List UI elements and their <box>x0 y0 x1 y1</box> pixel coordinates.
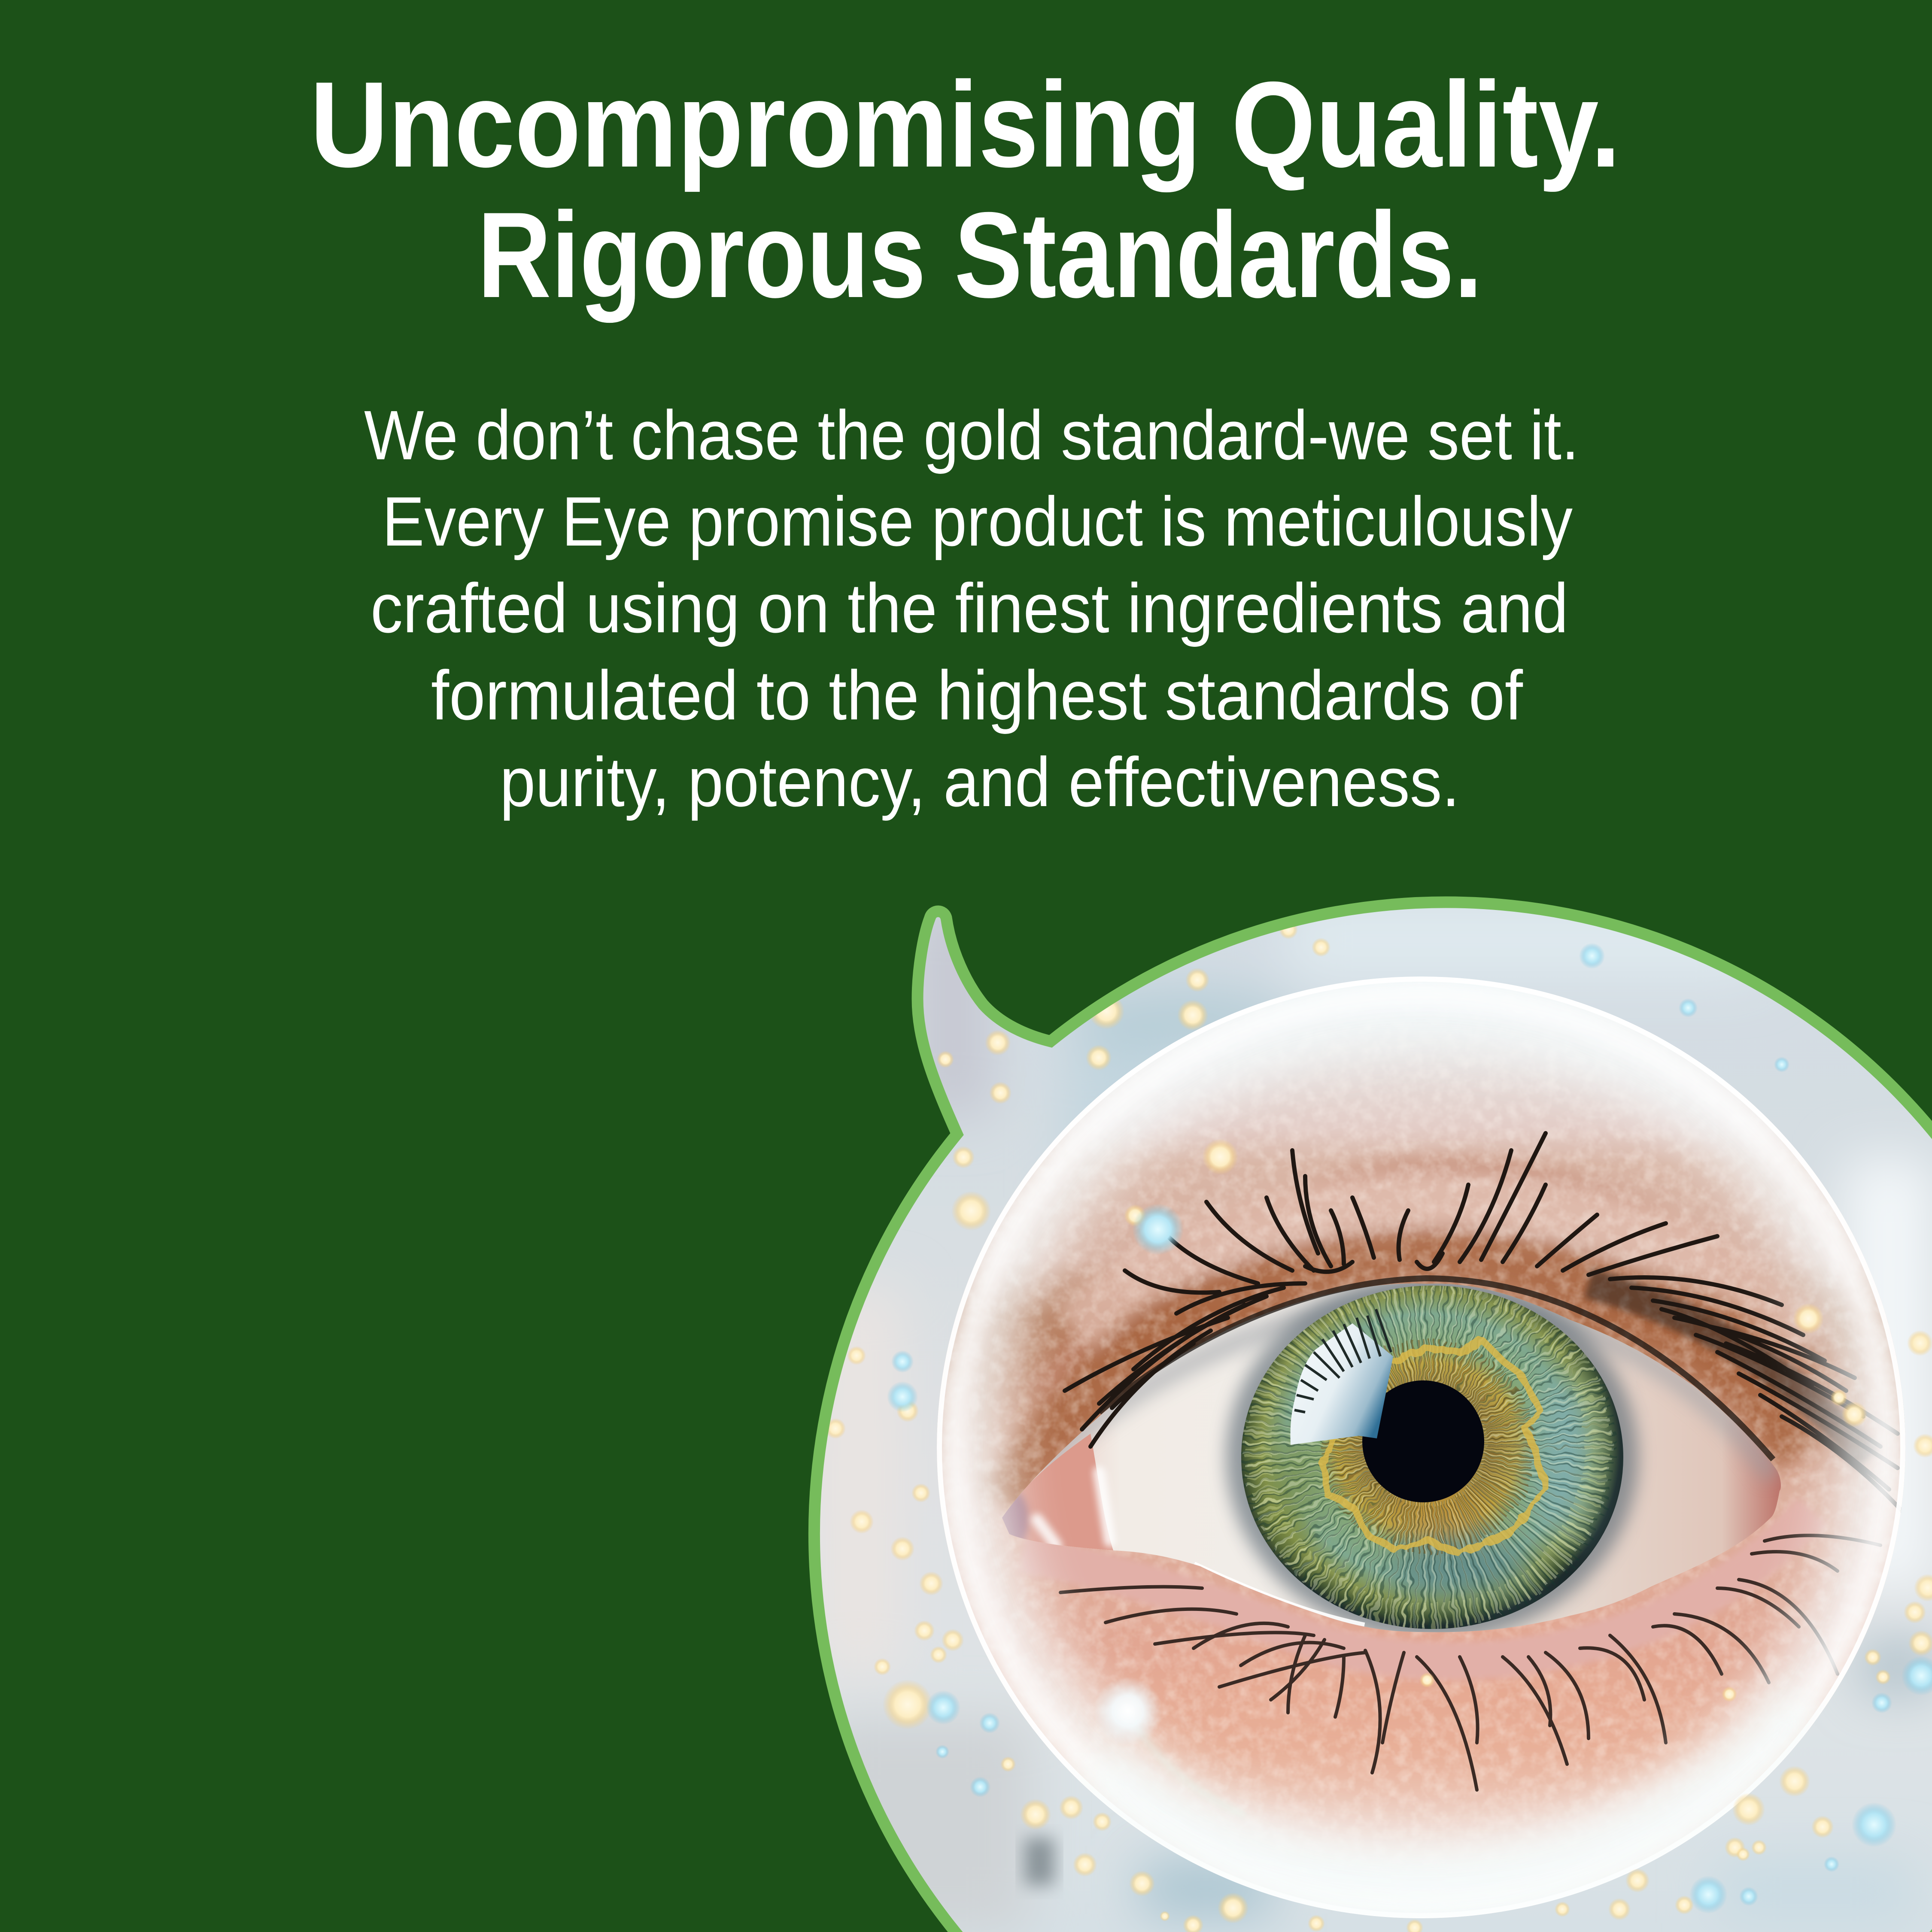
lower waterline highlight <box>1194 1565 1364 1626</box>
upper eyelid crease <box>1000 1165 1846 1502</box>
eye opening <box>987 1266 1803 1653</box>
iris base <box>1241 1286 1623 1629</box>
sparkles <box>825 920 1932 1932</box>
lower lid rim <box>1022 1511 1812 1661</box>
sclera <box>987 1266 1803 1653</box>
inner corner shading <box>994 1489 1028 1550</box>
iris <box>1241 1277 1623 1629</box>
reflected lashes <box>1294 1309 1391 1412</box>
caruncle highlights <box>1037 1472 1110 1545</box>
pupil <box>1362 1380 1484 1502</box>
upper eyelashes <box>1065 1133 1902 1511</box>
body text: We don’t chase the gold standard-we set it. <box>364 396 1579 474</box>
lash band shadow <box>1589 1283 1868 1459</box>
iris colour patches <box>1262 1378 1597 1597</box>
iris fibres <box>1258 1277 1597 1616</box>
skin texture <box>936 1073 1906 1889</box>
body text: crafted using on the finest ingredients and <box>371 569 1568 647</box>
speech bubble with eye photo illustration <box>807 897 1932 1932</box>
magnifying lens with eye <box>936 977 1906 1918</box>
body text <box>364 396 1579 821</box>
caruncle <box>1002 1434 1113 1550</box>
title: Uncompromising Quality. <box>310 57 1621 193</box>
skin <box>937 977 1905 1918</box>
lower eyelashes <box>1060 1535 1880 1790</box>
lens glint <box>1094 1677 1162 1745</box>
lens haze ring <box>939 979 1903 1916</box>
body text: purity, potency, and effectiveness. <box>500 743 1460 821</box>
lower lens crescent <box>1099 1700 1803 1881</box>
lid shadow on sclera <box>1039 1296 1773 1477</box>
clinic background scene <box>807 897 1932 1932</box>
body text: Every Eye promise product is meticulously <box>382 482 1573 561</box>
body text: formulated to the highest standards of <box>431 656 1523 734</box>
lens streak <box>1128 1711 1245 1816</box>
upper lash line <box>1099 1278 1773 1459</box>
iris shadow <box>1226 1274 1638 1641</box>
title: Rigorous Standards. <box>477 187 1482 324</box>
under-eye warm tone <box>1112 1640 1765 1786</box>
bubble outline <box>814 902 1932 1932</box>
window reflection <box>1290 1323 1393 1445</box>
gold collarette <box>1322 1339 1546 1554</box>
title <box>310 57 1621 324</box>
